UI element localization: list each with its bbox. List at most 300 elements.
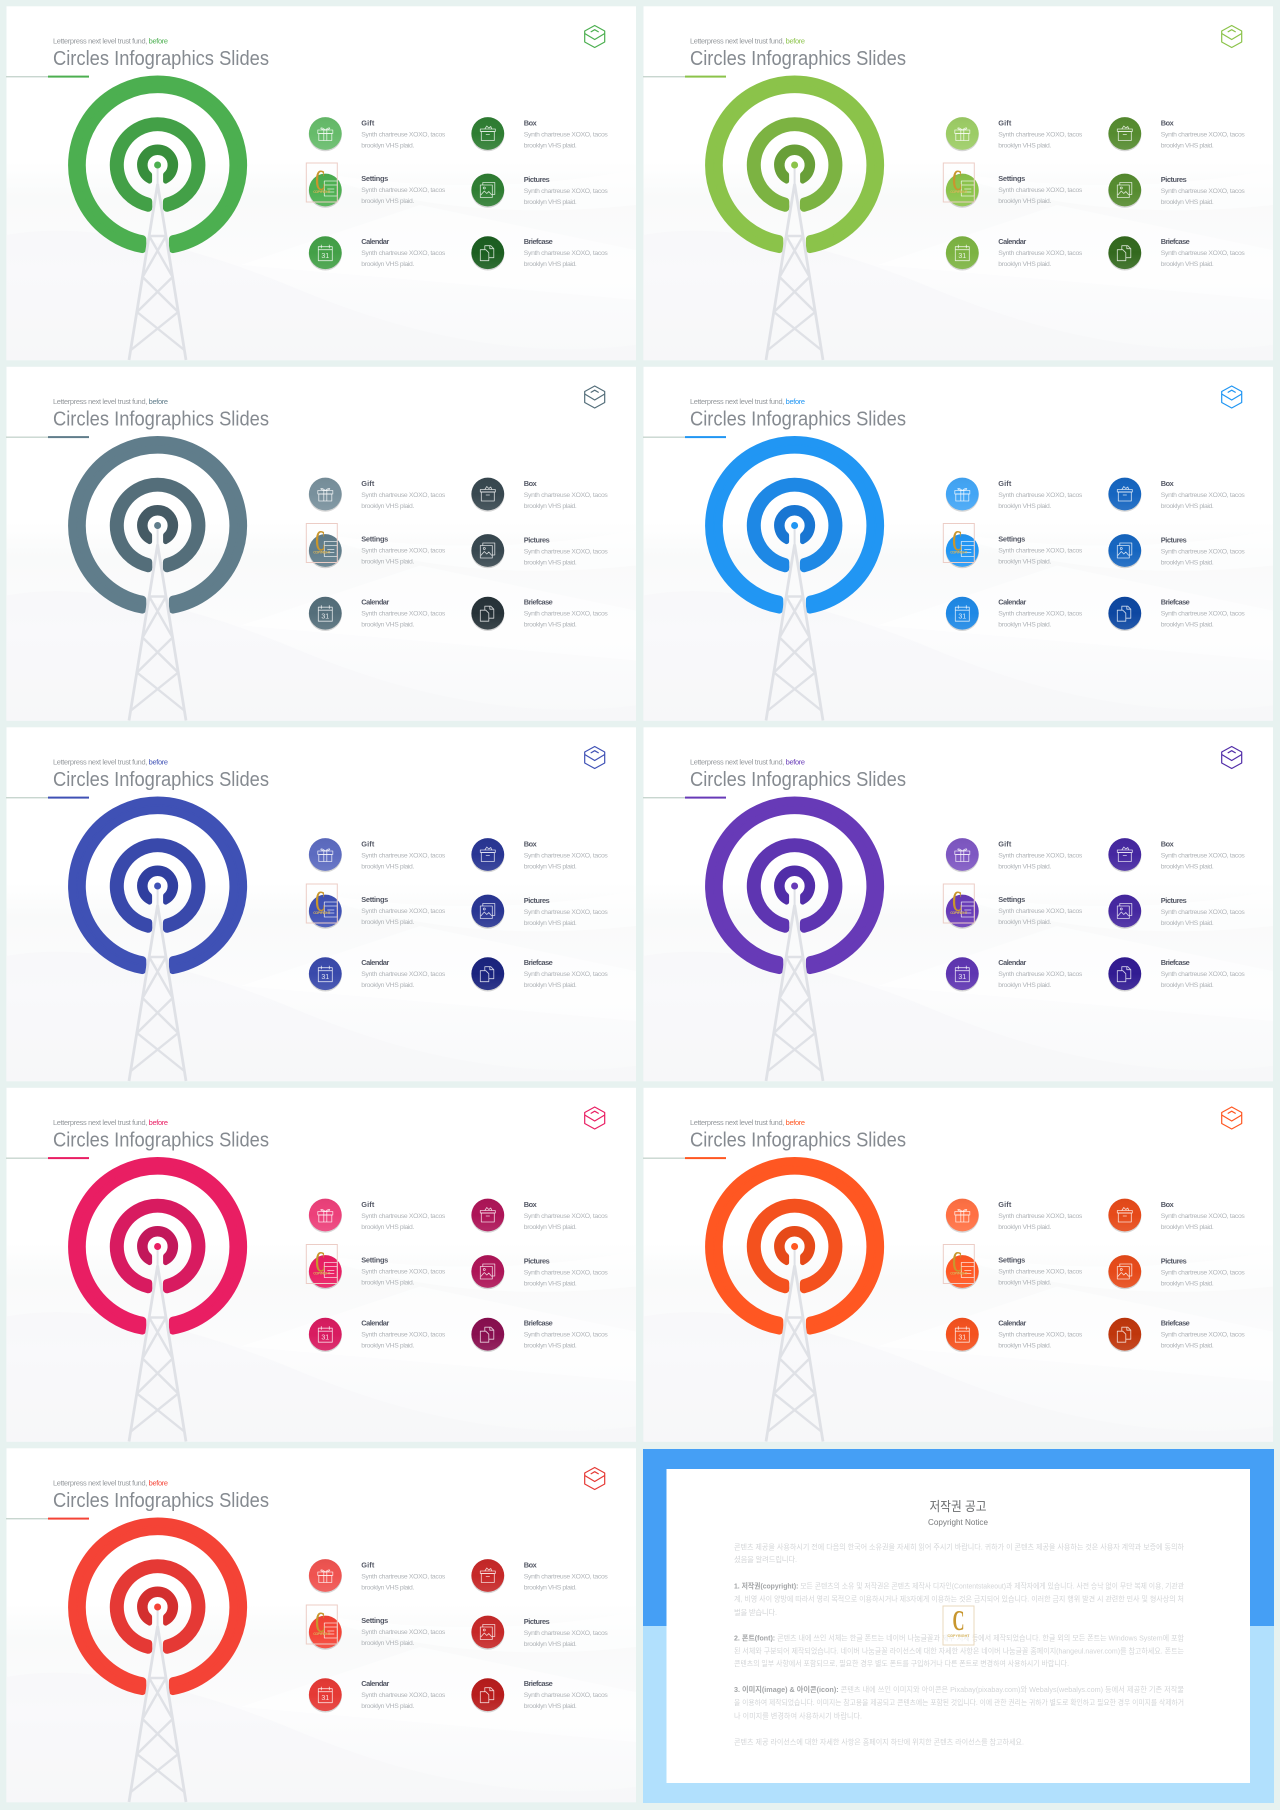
item: Gift: brooklyn VHS plaid. <box>998 142 1051 150</box>
item: Calendar: brooklyn VHS plaid. <box>361 1342 414 1349</box>
item: Settings <box>943 884 1083 929</box>
item: Briefcase: Briefcase <box>1161 237 1190 246</box>
heading: Circles Infographics Slides <box>53 769 269 791</box>
item: Gift: Gift <box>361 118 375 128</box>
gold watermark badge <box>943 1606 974 1645</box>
item: Pictures <box>471 174 608 208</box>
item: Pictures: brooklyn VHS plaid. <box>524 560 577 566</box>
item: Settings: COPYRIGHT <box>313 550 331 554</box>
item: Box <box>471 117 608 151</box>
heading underline <box>6 797 89 799</box>
heading: Letterpress next level trust fund, before <box>690 1118 805 1127</box>
item: Briefcase: Synth chartreuse XOXO, tacos <box>1161 1331 1245 1338</box>
icon: radio tower with signal rings <box>709 440 880 720</box>
item: Calendar: 31 <box>958 974 966 981</box>
item: Calendar: 31 <box>321 614 329 621</box>
item: Settings: C <box>315 1606 325 1639</box>
item: Box: brooklyn VHS plaid. <box>1161 864 1214 870</box>
item: Settings: brooklyn VHS plaid. <box>361 198 414 205</box>
heading <box>690 758 906 791</box>
item: Box: brooklyn VHS plaid. <box>524 142 577 150</box>
item: Pictures: Pictures <box>524 896 550 905</box>
item: Pictures <box>471 1616 608 1650</box>
item: Calendar: brooklyn VHS plaid. <box>998 261 1051 268</box>
item: Box: Synth chartreuse XOXO, tacos <box>524 1213 608 1220</box>
item: Settings: COPYRIGHT <box>950 550 968 554</box>
item: Settings: COPYRIGHT <box>313 190 331 194</box>
item: Briefcase <box>471 957 608 992</box>
item: Settings: brooklyn VHS plaid. <box>998 919 1051 926</box>
item: Calendar <box>946 957 1083 992</box>
item: Briefcase: Briefcase <box>524 1318 553 1327</box>
copyright body text: 콘텐츠 제공을 사용하시기 전에 다음의 한국어 소유권을 자세히 읽어 주시기 바랍니다. 귀하가 이 콘텐츠 제공을 사용하는 것은 사용자 계약과 보증에 동의하 <box>734 1542 1184 1552</box>
heading underline <box>643 797 726 799</box>
heading <box>53 1478 269 1512</box>
item: Gift: Synth chartreuse XOXO, tacos <box>998 852 1083 860</box>
item: Settings: Settings <box>998 895 1025 904</box>
item: Briefcase <box>471 236 608 270</box>
item: Box: brooklyn VHS plaid. <box>1161 142 1214 150</box>
item: Settings: brooklyn VHS plaid. <box>361 1640 414 1647</box>
item: Gift <box>946 117 1083 151</box>
item: Briefcase: Synth chartreuse XOXO, tacos <box>1161 610 1245 617</box>
item: Briefcase <box>471 1678 608 1712</box>
item: Settings <box>943 524 1083 568</box>
item: Gift <box>309 478 446 512</box>
item: Gift: Gift <box>361 479 375 488</box>
panel: deep orange slide <box>643 1088 1273 1442</box>
item: Settings: C <box>315 164 325 197</box>
item: Briefcase: Synth chartreuse XOXO, tacos <box>1161 250 1245 257</box>
item: Gift: Synth chartreuse XOXO, tacos <box>361 1213 446 1220</box>
item: Briefcase: brooklyn VHS plaid. <box>524 982 577 989</box>
item: Calendar: 31 <box>321 974 329 981</box>
item: Gift: brooklyn VHS plaid. <box>998 503 1051 510</box>
item: Box: Box <box>1161 840 1175 848</box>
item: Briefcase: brooklyn VHS plaid. <box>1161 621 1214 628</box>
item: Pictures: Pictures <box>524 175 550 184</box>
item: Calendar: 31 <box>321 1695 329 1702</box>
heading <box>53 36 269 70</box>
item: Briefcase: Synth chartreuse XOXO, tacos <box>524 610 608 617</box>
icon: logo cube <box>1222 386 1242 408</box>
heading <box>690 397 906 430</box>
panel: red slide <box>6 1448 636 1802</box>
item: Briefcase: Briefcase <box>1161 958 1190 967</box>
heading underline <box>6 1518 89 1520</box>
icon: radio tower with signal rings <box>72 440 243 720</box>
item: Box: brooklyn VHS plaid. <box>524 1584 577 1592</box>
item: Box <box>471 1199 608 1233</box>
item: Briefcase: brooklyn VHS plaid. <box>1161 261 1214 268</box>
item: Gift: Gift <box>998 118 1012 128</box>
item: Calendar: Synth chartreuse XOXO, tacos <box>361 1692 446 1699</box>
item: Gift: Gift <box>361 840 375 848</box>
item: Settings: Synth chartreuse XOXO, tacos <box>361 908 446 915</box>
item: Box <box>1108 1199 1245 1233</box>
item: Gift: Synth chartreuse XOXO, tacos <box>998 132 1083 138</box>
copyright body text: 3. 이미지(image) & 아이콘(icon): 콘텐츠 내에 쓰인 이미지와 아이콘은 Pixabay(pixabay.com)와 Webalys(webalys.com) 등에서 제공한 기존 저작물 <box>734 1685 1184 1694</box>
item: Pictures: Pictures <box>524 536 550 544</box>
item: Pictures: brooklyn VHS plaid. <box>1161 560 1214 566</box>
item: Gift: brooklyn VHS plaid. <box>998 1224 1051 1231</box>
item: Pictures: Synth chartreuse XOXO, tacos <box>1161 548 1245 556</box>
item: Calendar <box>309 1678 446 1712</box>
item: Briefcase: brooklyn VHS plaid. <box>524 621 577 628</box>
item: Box: brooklyn VHS plaid. <box>524 1224 577 1231</box>
item: Gift: Synth chartreuse XOXO, tacos <box>998 492 1083 499</box>
heading: Circles Infographics Slides <box>690 48 906 70</box>
item: Briefcase <box>1108 1318 1245 1352</box>
copyright body text: 을 이용하여 제작되었습니다. 이미지는 참고용을 제공되고 콘텐츠에는 포함된 것입니다. 이에 관한 권리는 귀하가 별도로 확인하고 필요한 경우 이미지를 삭제하거 <box>734 1698 1184 1707</box>
item: Pictures: brooklyn VHS plaid. <box>1161 199 1214 206</box>
item: Briefcase: Synth chartreuse XOXO, tacos <box>1161 971 1245 978</box>
item: Box: Box <box>524 840 538 848</box>
item: Box: Synth chartreuse XOXO, tacos <box>524 852 608 860</box>
heading: Letterpress next level trust fund, before <box>53 1118 168 1127</box>
item: Settings: Settings <box>998 534 1025 544</box>
copyright body text <box>734 1542 1184 1746</box>
item: Calendar: Synth chartreuse XOXO, tacos <box>998 250 1083 257</box>
icon: radio tower with signal rings <box>72 800 243 1081</box>
item: Pictures <box>471 1255 608 1289</box>
item: Gift: brooklyn VHS plaid. <box>361 1584 414 1592</box>
copyright title <box>928 1499 989 1527</box>
copyright body text: 나 이미지를 변경하여 사용하시기 바랍니다. <box>734 1712 862 1720</box>
copyright title: Copyright Notice <box>928 1518 989 1527</box>
heading: Letterpress next level trust fund, before <box>690 397 805 406</box>
copyright body text: 된 서체와 구분되어 제작되었습니다. 네이버 나눔글꼴 라이선스에 대한 자세한 사항은 네이버 나눔글꼴 홈페이지(hangeul.naver.com)를 참고하세요. 폰트는 <box>734 1646 1184 1656</box>
item: Briefcase: brooklyn VHS plaid. <box>1161 1342 1214 1349</box>
copyright body text: 2. 폰트(font): 콘텐츠 내에 쓰인 서체는 한글 폰트는 네이버 나눔글꼴과 제주 서체 등에서 제작되었습니다. 한글 외의 모든 폰트는 Windows System에 포함 <box>734 1634 1184 1642</box>
item: Gift <box>309 117 446 151</box>
item: Gift: brooklyn VHS plaid. <box>361 864 414 870</box>
icon: radio tower with signal rings <box>72 79 243 360</box>
item: Gift: Gift <box>998 1200 1012 1209</box>
item: Settings: Synth chartreuse XOXO, tacos <box>998 187 1083 194</box>
icon: logo cube <box>585 1107 605 1129</box>
item: Calendar: Synth chartreuse XOXO, tacos <box>998 971 1083 978</box>
item: Pictures: Pictures <box>1161 896 1187 905</box>
item: Calendar: brooklyn VHS plaid. <box>361 621 414 628</box>
icon: logo cube <box>1222 26 1242 48</box>
item: Briefcase: Synth chartreuse XOXO, tacos <box>524 1692 608 1699</box>
item: Briefcase <box>471 597 608 631</box>
item: Briefcase: brooklyn VHS plaid. <box>524 261 577 268</box>
item: Calendar: Calendar <box>361 1679 389 1688</box>
item: Box: brooklyn VHS plaid. <box>524 864 577 870</box>
item: Settings: C <box>315 524 325 558</box>
item: Settings: COPYRIGHT <box>950 190 968 194</box>
item: Pictures: Synth chartreuse XOXO, tacos <box>524 548 608 556</box>
item: Settings: Synth chartreuse XOXO, tacos <box>998 548 1083 554</box>
item: Calendar: brooklyn VHS plaid. <box>361 1703 414 1710</box>
item: Box: Box <box>1161 1200 1175 1209</box>
item: Gift: brooklyn VHS plaid. <box>361 503 414 510</box>
item: Settings: brooklyn VHS plaid. <box>998 198 1051 205</box>
item: Calendar: Synth chartreuse XOXO, tacos <box>361 971 446 978</box>
item: Settings: Synth chartreuse XOXO, tacos <box>361 1268 446 1276</box>
item: Box: brooklyn VHS plaid. <box>524 503 577 510</box>
item: Calendar: 31 <box>958 614 966 621</box>
heading: Circles Infographics Slides <box>53 48 269 70</box>
icon: radio tower with signal rings <box>709 1161 880 1442</box>
item: Settings: COPYRIGHT <box>313 1272 331 1276</box>
item: Settings: C <box>952 524 962 558</box>
item: Calendar: 31 <box>958 1335 966 1342</box>
item: Box <box>1108 117 1245 151</box>
heading <box>53 397 269 430</box>
item: Box: Synth chartreuse XOXO, tacos <box>524 492 608 499</box>
panel: pink slide <box>6 1088 636 1442</box>
copyright body text: 콘텐츠의 일부 사항에서 포함되므로, 필요한 경우 별도 폰트를 구입하거나 다른 폰트로 변경하여 사용하시기 바랍니다. <box>734 1659 1069 1668</box>
item: Settings <box>306 1244 446 1289</box>
item: Briefcase: Briefcase <box>524 237 553 246</box>
item: Calendar: brooklyn VHS plaid. <box>998 621 1051 628</box>
item: Calendar: Synth chartreuse XOXO, tacos <box>998 1331 1083 1338</box>
item: Pictures <box>1108 1255 1245 1289</box>
item: Settings: brooklyn VHS plaid. <box>361 558 414 566</box>
item: Pictures: Synth chartreuse XOXO, tacos <box>1161 909 1245 916</box>
heading <box>690 36 906 70</box>
item: Pictures <box>1108 174 1245 208</box>
heading: Letterpress next level trust fund, before <box>53 1478 168 1488</box>
item: Gift: Gift <box>361 1560 375 1570</box>
item: Settings <box>943 163 1083 208</box>
copyright body text: 1. 저작권(copyright): 모든 콘텐츠의 소유 및 저작권은 콘텐츠 제작사 디자인(Contentstakeout)과 제작자에게 있습니다. 사전 승낙 없이 무단 복제 이용, 기관관 <box>734 1582 1184 1590</box>
item: Calendar: Calendar <box>361 1318 389 1327</box>
item: Settings: Settings <box>998 174 1025 183</box>
item: Settings <box>943 1244 1083 1289</box>
item: Settings: Settings <box>361 1256 388 1264</box>
item: Gift <box>309 1199 446 1233</box>
item: Pictures: brooklyn VHS plaid. <box>524 920 577 927</box>
item: Box: brooklyn VHS plaid. <box>1161 1224 1214 1231</box>
item: Box: Box <box>524 479 538 488</box>
item: Calendar: Synth chartreuse XOXO, tacos <box>361 610 446 617</box>
item: Calendar <box>946 1318 1083 1352</box>
item: Pictures: Pictures <box>1161 536 1187 544</box>
item: Calendar: brooklyn VHS plaid. <box>998 982 1051 989</box>
item: Settings: Synth chartreuse XOXO, tacos <box>998 1268 1083 1276</box>
item: Pictures: Synth chartreuse XOXO, tacos <box>1161 1270 1245 1276</box>
item: Pictures: Synth chartreuse XOXO, tacos <box>524 1270 608 1276</box>
heading <box>53 1118 269 1152</box>
item: Pictures: Pictures <box>1161 1256 1187 1266</box>
item: Briefcase <box>1108 236 1245 270</box>
item: Settings: C <box>315 885 325 918</box>
item: Calendar: brooklyn VHS plaid. <box>361 261 414 268</box>
heading: Letterpress next level trust fund, before <box>53 36 168 46</box>
item: Briefcase <box>1108 597 1245 631</box>
item: Gift: Synth chartreuse XOXO, tacos <box>998 1213 1083 1220</box>
item: Gift: Gift <box>998 479 1012 488</box>
item: Calendar <box>309 597 446 631</box>
heading <box>690 1118 906 1152</box>
item: Briefcase: Briefcase <box>524 958 553 967</box>
item: Calendar: Synth chartreuse XOXO, tacos <box>361 250 446 257</box>
copyright body text: 셨음을 알려드립니다. <box>734 1555 797 1564</box>
item: Box: Box <box>1161 479 1175 488</box>
item: Pictures <box>471 895 608 929</box>
icon: logo cube <box>585 26 605 48</box>
icon: radio tower with signal rings <box>72 1161 243 1442</box>
item: Calendar: 31 <box>321 253 329 260</box>
item: Briefcase <box>1108 957 1245 992</box>
icon: logo cube <box>1222 746 1242 768</box>
item: Calendar: Calendar <box>998 597 1026 606</box>
item: Gift: Gift <box>998 840 1012 848</box>
heading underline <box>6 1157 89 1159</box>
heading underline <box>643 1157 726 1159</box>
item: Calendar <box>309 957 446 992</box>
heading underline <box>643 436 726 438</box>
item: Box <box>471 1559 608 1593</box>
item: Settings: brooklyn VHS plaid. <box>998 558 1051 566</box>
item: Settings: Settings <box>361 174 388 183</box>
item: Pictures: Pictures <box>524 1617 550 1626</box>
copyright body text: 벌을 받습니다. <box>734 1608 777 1617</box>
item: Pictures: Synth chartreuse XOXO, tacos <box>1161 188 1245 195</box>
item: Box: Synth chartreuse XOXO, tacos <box>524 132 608 138</box>
item: Settings: Settings <box>361 895 388 904</box>
item: Settings: C <box>952 885 962 918</box>
heading: Letterpress next level trust fund, before <box>690 758 805 766</box>
item: Gift: brooklyn VHS plaid. <box>998 864 1051 870</box>
item: Settings <box>306 163 446 208</box>
item: Briefcase: brooklyn VHS plaid. <box>1161 982 1214 989</box>
gold watermark badge: C <box>952 1606 964 1637</box>
item: Box <box>1108 478 1245 512</box>
item: Settings: brooklyn VHS plaid. <box>361 919 414 926</box>
item: Briefcase: Briefcase <box>524 1679 553 1688</box>
item: Gift <box>309 1559 446 1593</box>
item: Pictures: brooklyn VHS plaid. <box>524 199 577 206</box>
item: Settings: Synth chartreuse XOXO, tacos <box>361 187 446 194</box>
panel: copyright notice <box>643 1449 1274 1803</box>
item: Pictures: Synth chartreuse XOXO, tacos <box>524 1630 608 1637</box>
item: Briefcase: Synth chartreuse XOXO, tacos <box>524 250 608 257</box>
item: Settings: C <box>952 1246 962 1278</box>
item: Calendar: Calendar <box>998 237 1026 246</box>
icon: logo cube <box>585 386 605 408</box>
item: Gift <box>946 838 1083 872</box>
gold watermark badge: COPYRIGHT <box>948 1634 970 1638</box>
item: Gift: brooklyn VHS plaid. <box>361 142 414 150</box>
item: Gift: Synth chartreuse XOXO, tacos <box>361 492 446 499</box>
item: Settings: C <box>952 164 962 197</box>
panel: blue grey slide <box>6 367 636 721</box>
item: Calendar: 31 <box>958 253 966 260</box>
item: Box: brooklyn VHS plaid. <box>1161 503 1214 510</box>
icon: radio tower with signal rings <box>709 800 880 1081</box>
item: Calendar: Calendar <box>998 958 1026 967</box>
item: Gift <box>946 478 1083 512</box>
item: Settings: COPYRIGHT <box>950 1272 968 1276</box>
item: Gift: Synth chartreuse XOXO, tacos <box>361 132 446 138</box>
item: Box <box>471 838 608 872</box>
item: Calendar <box>946 236 1083 270</box>
panel: indigo slide <box>6 727 636 1081</box>
item: Pictures: Synth chartreuse XOXO, tacos <box>524 909 608 916</box>
panel: green slide <box>6 6 636 360</box>
item: Box: Synth chartreuse XOXO, tacos <box>1161 852 1245 860</box>
icon: logo cube <box>1222 1107 1242 1129</box>
item: Pictures: Pictures <box>1161 175 1187 184</box>
item: Pictures: brooklyn VHS plaid. <box>1161 1280 1214 1288</box>
item: Box: Synth chartreuse XOXO, tacos <box>1161 1213 1245 1220</box>
item: Calendar: brooklyn VHS plaid. <box>998 1342 1051 1349</box>
panel: blue slide <box>643 367 1273 721</box>
item: Pictures: brooklyn VHS plaid. <box>1161 920 1214 927</box>
item: Pictures: brooklyn VHS plaid. <box>524 1641 577 1648</box>
copyright body text: 콘텐츠 제공 라이선스에 대한 자세한 사항은 홈페이지 하단에 위치한 콘텐츠 라이선스를 참고하세요. <box>734 1738 1024 1746</box>
icon: radio tower with signal rings <box>72 1521 243 1802</box>
item: Pictures: brooklyn VHS plaid. <box>524 1280 577 1288</box>
item: Calendar: Calendar <box>998 1318 1026 1327</box>
item: Gift <box>946 1199 1083 1233</box>
heading underline <box>643 76 726 78</box>
item: Briefcase: brooklyn VHS plaid. <box>524 1703 577 1710</box>
item: Briefcase: Synth chartreuse XOXO, tacos <box>524 971 608 978</box>
item: Settings: Synth chartreuse XOXO, tacos <box>998 908 1083 915</box>
item: Pictures <box>471 534 608 568</box>
item: Calendar: Calendar <box>361 958 389 967</box>
item: Gift: Gift <box>361 1200 375 1209</box>
item: Gift <box>309 838 446 872</box>
panel: deep purple slide <box>643 727 1273 1081</box>
item: Settings <box>306 524 446 568</box>
heading: Circles Infographics Slides <box>690 1130 906 1152</box>
item: Box: Synth chartreuse XOXO, tacos <box>1161 132 1245 138</box>
item: Briefcase: Briefcase <box>524 597 553 606</box>
icon: radio tower with signal rings <box>709 79 880 360</box>
item: Calendar <box>946 597 1083 631</box>
item: Calendar: Synth chartreuse XOXO, tacos <box>361 1331 446 1338</box>
heading: Circles Infographics Slides <box>53 1490 269 1512</box>
heading: Letterpress next level trust fund, before <box>53 397 168 406</box>
panel: light green slide <box>643 6 1273 360</box>
icon: logo cube <box>585 746 605 768</box>
item: Settings: Synth chartreuse XOXO, tacos <box>361 548 446 554</box>
copyright body text: 계, 비영 사이 양방에 따라서 영리 목적으로 이용하시거나 제3자에게 이용하는 것은 금지되어 있습니다. 이러한 금지 행위 발견 시 관련한 민사 및 형사상의 처 <box>734 1594 1184 1604</box>
heading: Circles Infographics Slides <box>690 769 906 791</box>
item: Settings: brooklyn VHS plaid. <box>361 1280 414 1286</box>
item: Pictures <box>1108 895 1245 929</box>
item: Gift: Synth chartreuse XOXO, tacos <box>361 852 446 860</box>
item: Box: Box <box>524 1560 538 1570</box>
item: Settings <box>306 1605 446 1650</box>
heading: Circles Infographics Slides <box>690 408 906 430</box>
item: Briefcase: brooklyn VHS plaid. <box>524 1342 577 1349</box>
item: Briefcase: Synth chartreuse XOXO, tacos <box>524 1331 608 1338</box>
item: Settings: COPYRIGHT <box>313 911 331 915</box>
item: Pictures: Synth chartreuse XOXO, tacos <box>524 188 608 195</box>
item: Calendar: Synth chartreuse XOXO, tacos <box>998 610 1083 617</box>
item: Calendar: Calendar <box>361 597 389 606</box>
item: Box <box>471 478 608 512</box>
heading: Circles Infographics Slides <box>53 1130 269 1152</box>
heading underline <box>6 436 89 438</box>
copyright title: 저작권 공고 <box>930 1499 987 1514</box>
item: Briefcase: Briefcase <box>1161 597 1190 606</box>
item: Settings: brooklyn VHS plaid. <box>998 1280 1051 1286</box>
item: Box: Box <box>1161 118 1175 128</box>
item: Settings: Settings <box>998 1256 1025 1264</box>
item: Calendar <box>309 1318 446 1352</box>
item: Calendar: brooklyn VHS plaid. <box>361 982 414 989</box>
heading: Letterpress next level trust fund, before <box>53 758 168 766</box>
